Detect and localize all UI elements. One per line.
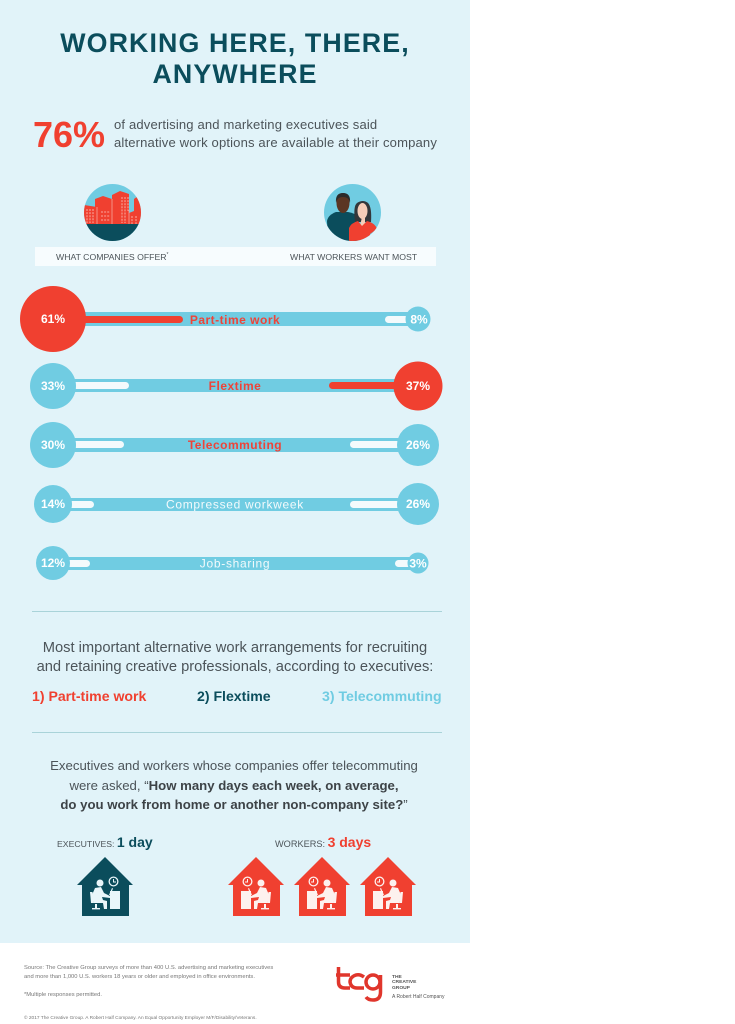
big stat: 76%: 76% (33, 114, 105, 155)
row: part-time work: 61% (41, 312, 65, 326)
row: part-time work (20, 286, 430, 352)
header: what workers want most: WHAT WORKERS WANT MOST (290, 252, 417, 262)
row: part-time work: Part-time work (190, 313, 280, 327)
ranking: part-time work: 1) Part-time work (32, 688, 146, 704)
row: job-sharing: Job-sharing (200, 556, 270, 570)
row: flextime: Flextime (209, 379, 261, 393)
copyright: © 2017 The Creative Group. A Robert Half Company. An Equal Opportunity Employer M/F/Disability/Veterans. (24, 1016, 257, 1021)
telecommuting question (50, 758, 418, 812)
stat description: of advertising and marketing executives said (114, 117, 377, 132)
row: job-sharing: 3% (409, 556, 427, 570)
logo text: THE (392, 975, 402, 980)
logo: tcg (336, 967, 445, 1002)
row: telecommuting: 26% (406, 438, 430, 452)
row: flextime (30, 362, 442, 410)
recruiting text (37, 640, 433, 674)
ranking: telecommuting: 3) Telecommuting (322, 688, 442, 704)
footnote: *Multiple responses permitted. (24, 992, 102, 998)
logo tagline: A Robert Half Company (392, 994, 445, 1000)
telecommuting question: Executives and workers whose companies offer telecommuting (50, 758, 418, 773)
title (60, 28, 410, 89)
icon: house, red 2 (294, 857, 350, 916)
recruiting text: and retaining creative professionals, according to executives: (37, 658, 433, 674)
row: compressed workweek: 26% (406, 497, 430, 511)
row: telecommuting (30, 422, 439, 468)
title: ANYWHERE (152, 59, 318, 89)
row: part-time work: 8% (410, 312, 428, 326)
row: compressed workweek: 14% (41, 497, 65, 511)
logo text: GROUP (392, 986, 410, 991)
row: compressed workweek: Compressed workweek (166, 498, 304, 512)
column header band (35, 247, 436, 266)
row: flextime: 37% (406, 379, 430, 393)
telecommuting question: do you work from home or another non-company site?” (60, 797, 408, 812)
label: workers 3 days: WORKERS: 3 days (275, 834, 371, 850)
comparison chart (20, 286, 442, 580)
icon: two workers (324, 184, 381, 241)
row: job-sharing: 12% (41, 556, 65, 570)
row: compressed workweek (34, 483, 439, 525)
telecommuting question: were asked, “How many days each week, on average, (69, 778, 399, 792)
ranking: flextime: 2) Flextime (197, 688, 271, 704)
icon: house, red 3 (360, 857, 416, 916)
logo text (392, 975, 416, 991)
row: job-sharing (36, 546, 428, 580)
panel: main background (0, 0, 470, 943)
logo mark (336, 967, 382, 1002)
row: flextime: 33% (41, 379, 65, 393)
icon: house, red 1 (228, 857, 284, 916)
stat description (114, 117, 437, 150)
source note: Source: The Creative Group surveys of more than 400 U.S. advertising and marketing executives (24, 965, 273, 971)
label: executives 1 day: EXECUTIVES: 1 day (57, 834, 153, 850)
logo text: CREATIVE (392, 980, 416, 985)
row: telecommuting: 30% (41, 438, 65, 452)
title: WORKING HERE, THERE, (60, 28, 410, 58)
stat description: alternative work options are available at their company (114, 135, 437, 150)
recruiting text: Most important alternative work arrangements for recruiting (43, 640, 427, 656)
icon: office buildings (84, 184, 141, 241)
header: what companies offer: WHAT COMPANIES OFFER* (56, 252, 168, 262)
row: telecommuting: Telecommuting (188, 438, 282, 452)
source note (24, 965, 274, 980)
icon: house, teal (77, 857, 133, 916)
source note: and more than 1,000 U.S. workers 18 years or older and employed in office environments. (24, 974, 255, 980)
